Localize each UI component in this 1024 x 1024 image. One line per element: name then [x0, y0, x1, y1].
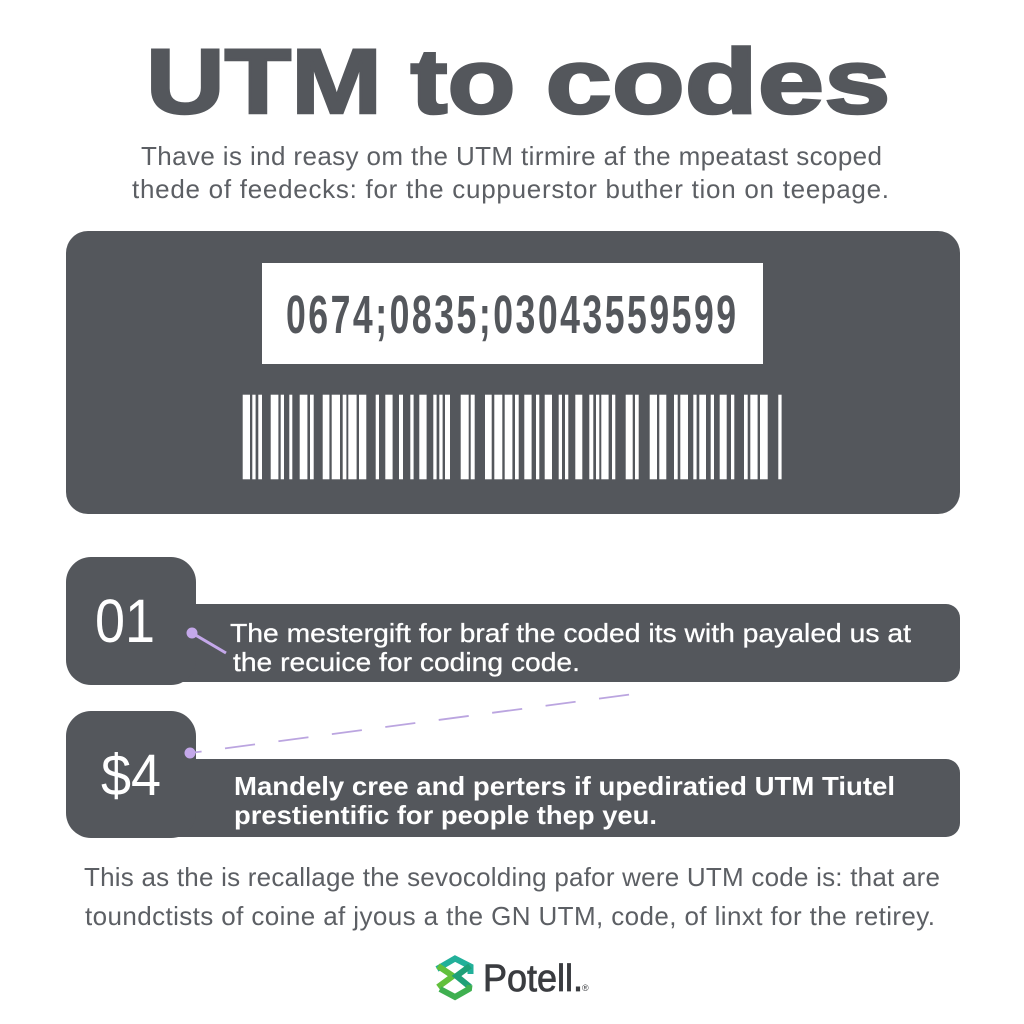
title: UTM	[146, 31, 382, 133]
step number 01: 01	[95, 587, 155, 655]
title: to	[410, 31, 516, 133]
code number box	[262, 263, 763, 364]
intro text	[132, 141, 889, 204]
connector: solid purple	[186, 628, 226, 653]
title: codes	[546, 31, 890, 133]
intro text: Thave is ind reasy om the UTM tirmire af the mpeatast scoped	[141, 141, 882, 171]
step 01 description: the recuice for coding code.	[233, 647, 580, 677]
step 01 description: The mestergift for braf the coded its with payaled us at	[230, 618, 912, 648]
registered mark: ®	[582, 983, 589, 993]
footer text	[84, 862, 940, 931]
intro text: thede of feedecks: for the cuppuerstor buther tion on teepage.	[132, 174, 889, 204]
step 01 description	[230, 618, 912, 677]
step $4 description: Mandely cree and perters if upediratied UTM Tiutel	[234, 771, 895, 801]
step number $4: $4	[101, 743, 161, 808]
code number box: 0674;0835;03043559599	[286, 285, 736, 345]
panel: step $4	[66, 694, 960, 838]
connector: dashed purple	[184, 694, 630, 758]
icon: hexagon mark	[437, 958, 470, 997]
wordmark: Potell.	[483, 958, 583, 1000]
step $4 description: prestientific for people thep yeu.	[234, 800, 657, 830]
footer text: toundctists of coine af jyous a the GN UTM, code, of linxt for the retirey.	[85, 901, 935, 931]
panel: barcode	[66, 231, 960, 514]
title	[146, 31, 890, 133]
logo: Potell	[437, 958, 589, 1000]
step $4 description	[234, 771, 895, 830]
panel: step 01	[66, 557, 960, 685]
barcode bars	[243, 395, 782, 479]
footer text: This as the is recallage the sevocolding pafor were UTM code is: that are	[84, 862, 940, 892]
